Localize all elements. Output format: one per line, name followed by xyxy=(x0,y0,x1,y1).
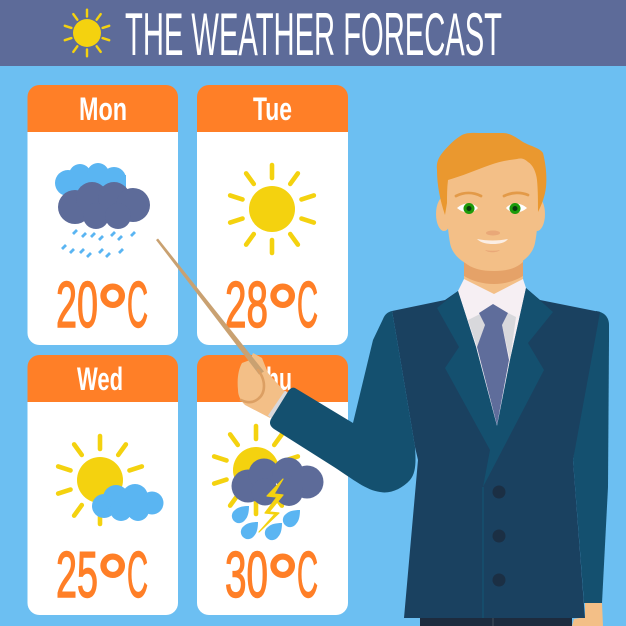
right sleeve xyxy=(573,311,609,603)
icon: storm xyxy=(214,426,324,540)
nose xyxy=(486,230,500,236)
shirt cuff xyxy=(270,392,287,417)
day label: Wed: Wed xyxy=(77,361,123,397)
right ear xyxy=(529,197,545,231)
shirt shadow xyxy=(468,313,516,360)
temperature: 25°C: 25 xyxy=(56,538,98,611)
jacket front edge xyxy=(482,487,484,618)
jacket buttons xyxy=(492,486,506,586)
left ear xyxy=(436,197,452,231)
temperature: 20°C: 20 xyxy=(56,268,98,341)
icon: header sun xyxy=(65,10,109,56)
tie xyxy=(477,304,509,425)
trousers xyxy=(420,612,572,626)
presenter xyxy=(156,133,609,626)
panel: Monday xyxy=(28,85,178,359)
day label: Tue: Tue xyxy=(253,91,292,127)
face xyxy=(447,155,538,270)
lapels xyxy=(437,288,553,487)
temperature: 28°C: ° xyxy=(266,269,299,359)
temperature: 25°C xyxy=(56,538,148,626)
jacket body xyxy=(392,288,600,618)
icon: rain cloud xyxy=(55,163,150,257)
eyebrows xyxy=(456,193,528,196)
panel: Wednesday xyxy=(28,355,178,626)
icon: sun and cloud xyxy=(58,436,163,524)
neck xyxy=(464,255,523,298)
panel: Tuesday xyxy=(197,85,348,359)
panel: Thursday: C xyxy=(297,538,318,611)
pointer stick xyxy=(156,238,264,374)
neck shadow xyxy=(464,262,523,284)
temperature: 30°C xyxy=(225,538,318,626)
hair xyxy=(437,133,546,215)
right hand xyxy=(572,603,603,626)
header banner xyxy=(0,0,626,68)
panel: Tuesday: C xyxy=(297,268,318,341)
eyes xyxy=(457,203,527,214)
hand xyxy=(238,353,285,418)
temperature: 20°C: ° xyxy=(96,269,129,359)
temperature: 20°C xyxy=(56,268,148,359)
finger curve xyxy=(241,370,264,402)
temperature: 28°C: 28 xyxy=(225,268,268,341)
shirt xyxy=(458,279,526,426)
panel: Monday: C xyxy=(127,268,148,341)
mouth xyxy=(477,239,508,244)
panel: Thursday xyxy=(197,355,348,626)
temperature: 30°C: 30 xyxy=(225,538,268,611)
temperature: 28°C xyxy=(225,268,318,359)
panel: Wednesday: C xyxy=(127,538,148,611)
day label: Thu: Thu xyxy=(253,361,292,397)
icon: sun xyxy=(230,165,314,253)
lower lip xyxy=(485,250,500,252)
raised sleeve xyxy=(270,311,415,492)
day label: Mon: Mon xyxy=(79,91,127,127)
